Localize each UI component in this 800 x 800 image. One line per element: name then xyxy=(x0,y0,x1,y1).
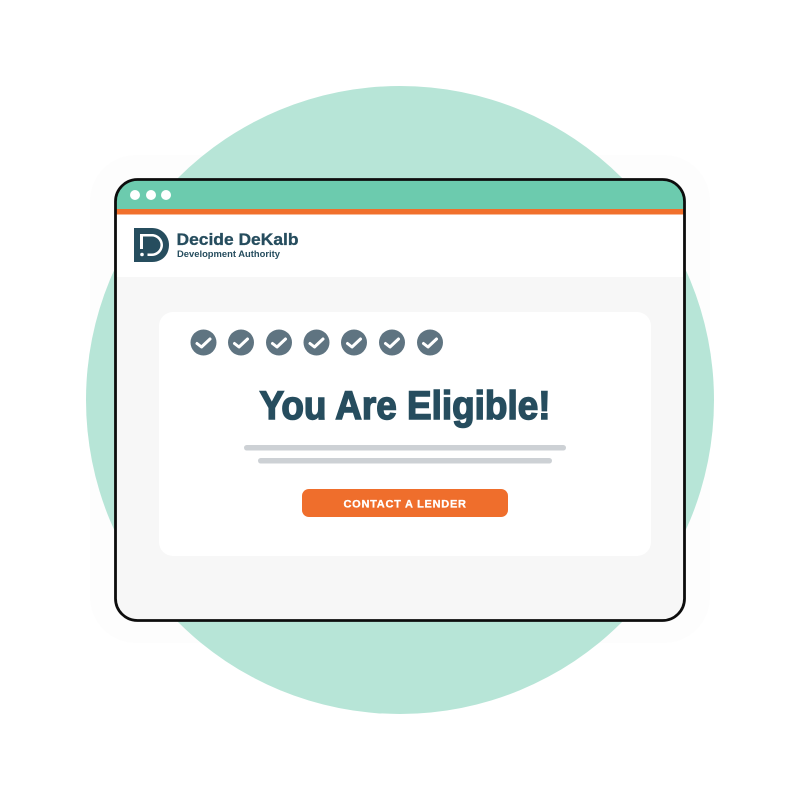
window halo xyxy=(90,155,710,643)
placeholder text line 2 xyxy=(258,458,552,464)
heading: You Are Eligible! xyxy=(260,384,550,428)
placeholder text line 1 xyxy=(244,445,566,450)
progress checkmarks xyxy=(190,330,443,356)
check 3 xyxy=(266,330,292,356)
logo mark xyxy=(134,228,169,262)
button label: CONTACT A LENDER xyxy=(344,498,466,510)
check 2 xyxy=(228,330,254,356)
window border xyxy=(116,180,684,620)
window control dots xyxy=(130,190,171,200)
contact button xyxy=(302,489,508,517)
check 6 xyxy=(379,330,405,356)
logo name: Decide DeKalb xyxy=(176,231,298,249)
card background xyxy=(159,312,651,556)
background circle xyxy=(86,86,714,714)
window top area xyxy=(116,180,684,214)
logo tagline: Development Authority xyxy=(177,249,280,259)
orange accent stripe xyxy=(114,209,686,214)
logo xyxy=(134,228,298,262)
check 5 xyxy=(341,330,367,356)
window body xyxy=(116,180,684,620)
button background xyxy=(302,489,508,517)
logo band xyxy=(114,214,686,277)
browser window xyxy=(114,178,686,620)
content card xyxy=(159,312,651,556)
check 4 xyxy=(304,330,330,356)
check 1 xyxy=(190,330,216,356)
check 7 xyxy=(417,330,443,356)
title bar xyxy=(114,178,686,209)
